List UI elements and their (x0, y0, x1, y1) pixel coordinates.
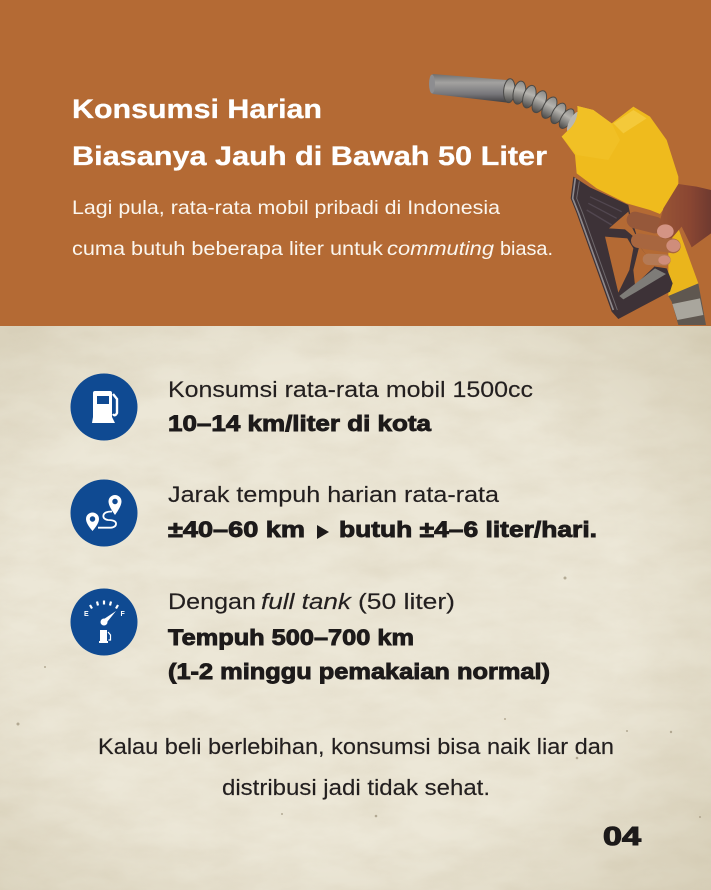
fingernails (657, 224, 674, 238)
gaps showing the background (605, 237, 633, 293)
intro text: cuma butuh beberapa liter untuk (72, 238, 383, 260)
closing statement (98, 734, 614, 800)
icon: route pins (70, 480, 138, 546)
text: full tank range: full tank (261, 589, 353, 614)
back of hand and thumb (657, 184, 711, 247)
yellow body (562, 106, 678, 214)
text: full tank range: Tempuh 500–700 km (168, 625, 414, 650)
title: Biasanya Jauh di Bawah 50 Liter (72, 141, 548, 171)
text: average consumption: Konsumsi rata-rata mobil 1500cc (168, 377, 533, 402)
text: daily distance: butuh ±4–6 liter/hari. (339, 517, 597, 542)
list item 2 (70, 480, 597, 546)
lower yellow grip (668, 203, 698, 296)
list item 1 (70, 374, 533, 440)
text: daily distance (168, 482, 597, 542)
text: full tank range: (1-2 minggu pemakaian normal) (168, 659, 550, 684)
intro text: biasa. (500, 238, 553, 260)
icon: fuel nozzle held by hand (429, 74, 711, 325)
title (72, 94, 548, 171)
intro text (72, 197, 553, 260)
icon: fuel gauge (70, 588, 138, 656)
intro text: Lagi pula, rata-rata mobil pribadi di Indonesia (72, 197, 500, 219)
text: full tank range: (50 liter) (358, 589, 455, 614)
list item 3 (70, 588, 550, 684)
icon: fuel gauge: F (120, 611, 126, 618)
text: daily distance: ±40–60 km (168, 517, 305, 542)
panel: header band (0, 0, 711, 326)
closing statement: distribusi jadi tidak sehat. (222, 775, 490, 800)
text: full tank range (168, 589, 550, 684)
text: daily distance: Jarak tempuh harian rata-rata (168, 482, 500, 507)
text: average consumption (168, 377, 533, 436)
panel: paper background (0, 326, 711, 890)
icon: fuel gauge: E (84, 611, 89, 618)
intro text: commuting (387, 238, 494, 260)
closing statement: Kalau beli berlebihan, konsumsi bisa naik liar dan (98, 734, 614, 759)
title: Konsumsi Harian (72, 94, 322, 124)
text: average consumption: 10–14 km/liter di kota (168, 411, 432, 436)
page number: 04 (603, 821, 642, 851)
trigger metal (619, 268, 666, 299)
fingers (635, 220, 673, 260)
text: full tank range: Dengan (168, 589, 256, 614)
dark handle frame (571, 177, 673, 319)
handle and lower parts (571, 177, 711, 325)
metal hose collar (668, 283, 706, 325)
icon: fuel pump (70, 374, 138, 440)
hand (635, 184, 711, 265)
nozzle spout (429, 74, 678, 214)
